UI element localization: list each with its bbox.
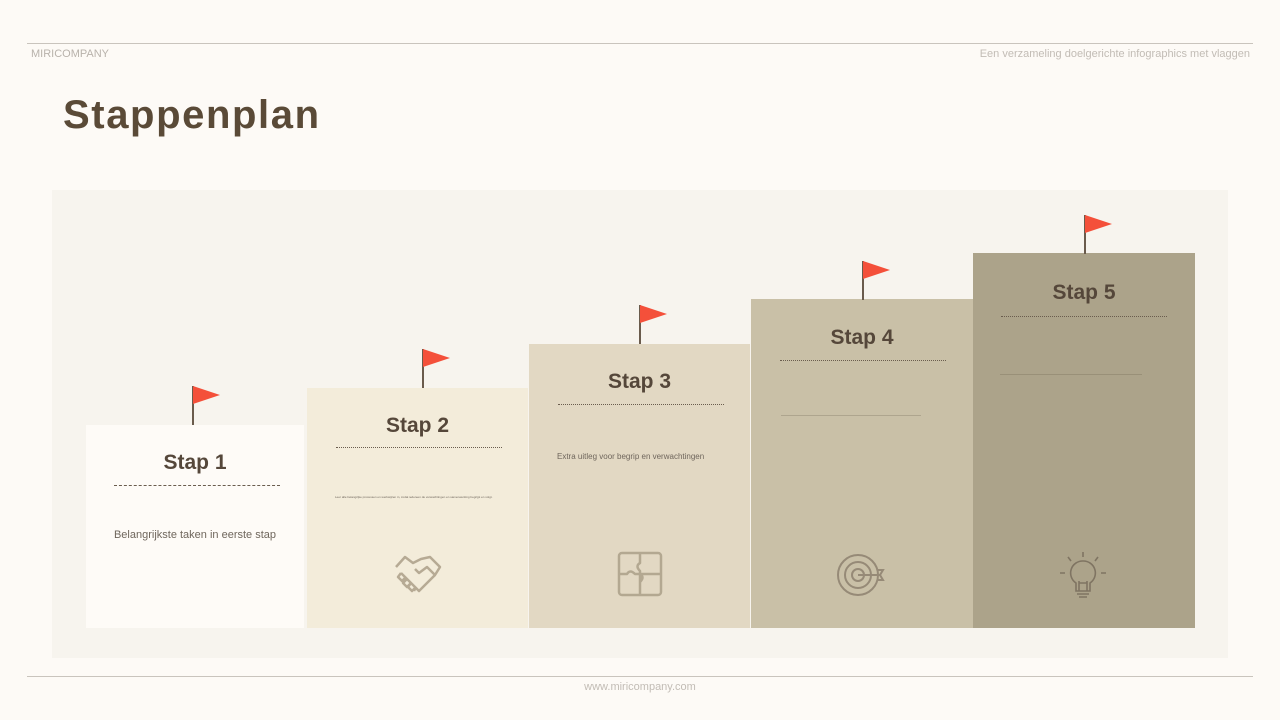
- icon: handshake: [395, 556, 442, 592]
- step 1: [86, 425, 304, 628]
- step 2: Stap 2: [386, 414, 449, 437]
- flag 4: [862, 261, 890, 300]
- icon: target: [837, 554, 885, 596]
- flag 1: [192, 386, 220, 425]
- footer: www.miricompany.com: [584, 681, 696, 693]
- icon: puzzle: [618, 552, 662, 596]
- step 3: Extra uitleg voor begrip en verwachtingen: [557, 452, 704, 461]
- step 2: [307, 388, 528, 628]
- step 1: Stap 1: [163, 451, 227, 474]
- step 4: [751, 299, 973, 628]
- step 5: [973, 253, 1195, 628]
- step 5: Stap 5: [1052, 281, 1116, 304]
- step 3: [529, 344, 750, 628]
- panel: steps: [52, 190, 1228, 658]
- header right: Een verzameling doelgerichte infographics met vlaggen: [980, 48, 1250, 60]
- title: Stappenplan: [63, 93, 321, 137]
- step 1: Belangrijkste taken in eerste stap: [114, 529, 276, 541]
- step 3: Stap 3: [608, 370, 671, 393]
- step 4: Stap 4: [830, 326, 894, 349]
- step 2: Leer alle belangrijke processen en werkwijzen in, zodat iedereen de verwachtingen en samenwerking begrijpt en volgt.: [335, 495, 492, 499]
- flag 2: [422, 349, 450, 388]
- icon: light bulb: [1060, 552, 1106, 598]
- flag 3: [639, 305, 667, 344]
- header left: MIRICOMPANY: [31, 48, 109, 60]
- flag 5: [1084, 215, 1112, 254]
